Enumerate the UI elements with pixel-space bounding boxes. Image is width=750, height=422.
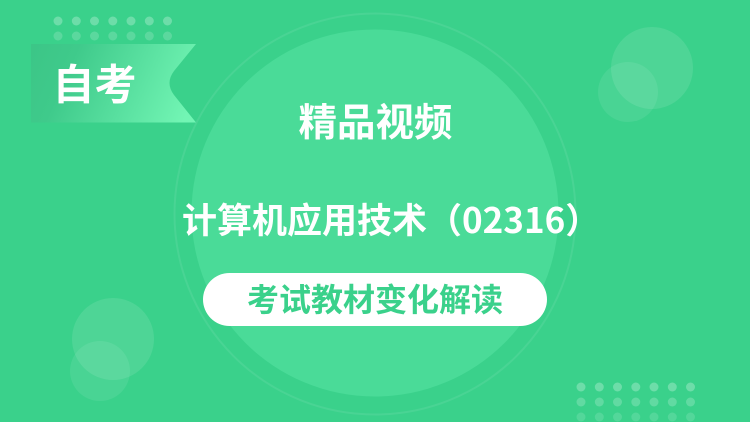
large central circle with ring (174, 14, 576, 414)
decorative circles bottom left (70, 298, 154, 401)
subtitle: course name: 计算机应用技术（02316） (182, 193, 600, 244)
pill: exam material changes (203, 273, 547, 326)
decorative circles top right (598, 27, 693, 122)
dot grid top left (54, 16, 172, 40)
ribbon banner (31, 44, 196, 122)
pill: exam material changes: 考试教材变化解读 (247, 275, 503, 321)
banner label: 自考 (52, 52, 137, 112)
dot grid bottom right (576, 382, 695, 422)
heading: 精品视频 (298, 92, 453, 148)
